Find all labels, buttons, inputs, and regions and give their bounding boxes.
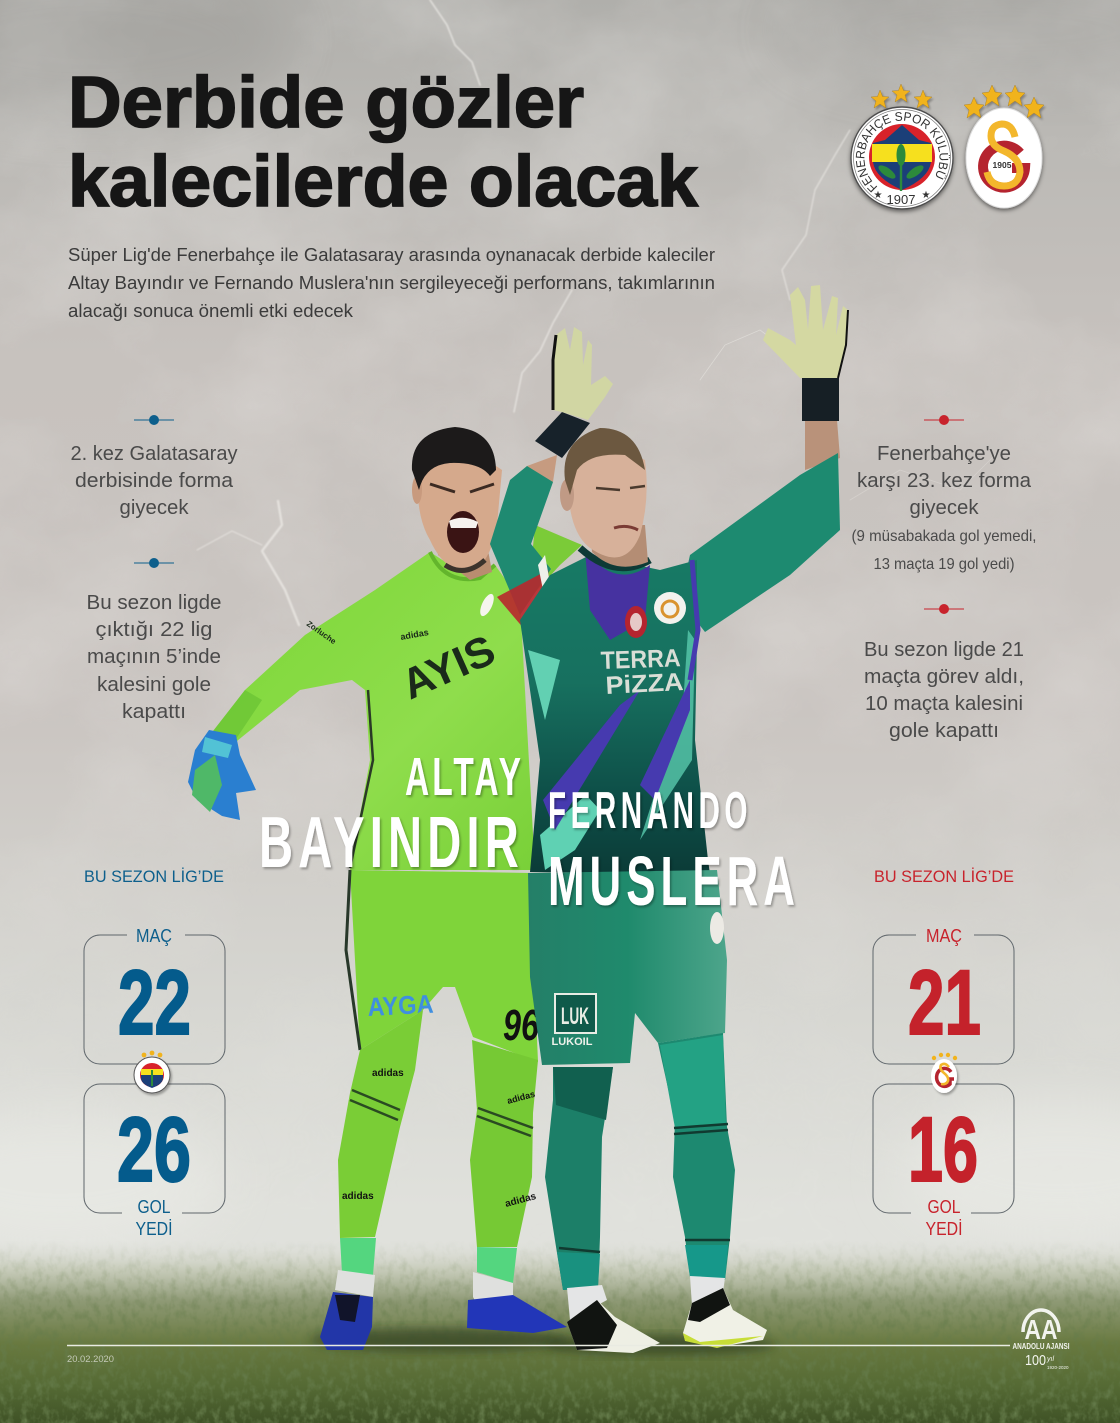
player: Altay Bayındır: AYIS xyxy=(395,626,502,709)
left forearm and glove xyxy=(527,455,557,490)
far shoulder xyxy=(528,525,582,600)
logo: Fenerbahçe badge: 1907 xyxy=(887,192,915,207)
left sleeve xyxy=(490,466,553,615)
box: goals conceded xyxy=(84,1084,225,1239)
logo: Galatasaray badge xyxy=(964,85,1044,208)
logo: Anadolu Ajansı: 1920-2020 xyxy=(1047,1365,1069,1370)
player: Altay Bayındır: AYGA xyxy=(367,989,434,1022)
ground shadow xyxy=(310,1328,570,1352)
title xyxy=(68,63,699,222)
player: Altay Bayındır: adidas xyxy=(504,1191,538,1210)
player names: ALTAY xyxy=(405,747,524,807)
player: Altay Bayındır: adidas xyxy=(372,1068,404,1079)
box: goals conceded: 16 xyxy=(908,1099,978,1201)
legs xyxy=(545,1067,613,1290)
player: Altay Bayındır: adidas xyxy=(506,1089,536,1106)
neck and head xyxy=(590,525,648,567)
box: matches xyxy=(873,926,1014,1064)
socks xyxy=(340,1238,376,1275)
right fact 2: 10 maçta kalesini xyxy=(865,693,1023,715)
title: kalecilerde olacak xyxy=(68,142,699,222)
lightning bolts xyxy=(197,0,1000,625)
small Galatasaray badge xyxy=(931,1053,957,1093)
left fact 1: derbisinde forma xyxy=(75,470,234,492)
logo: Fenerbahçe badge: ★ xyxy=(922,190,931,201)
left fact 2 xyxy=(86,558,222,723)
boots xyxy=(567,1300,660,1353)
player: Fernando Muslera: LUKOIL xyxy=(552,1036,593,1048)
right fact 1: (9 müsabakada gol yemedi, xyxy=(852,528,1036,545)
shorts xyxy=(528,870,727,1065)
intro paragraph: alacağı sonuca önemli etki edecek xyxy=(68,301,354,321)
boots xyxy=(320,1292,373,1350)
stats: Galatasaray xyxy=(873,867,1014,1239)
left fact 1: giyecek xyxy=(120,497,190,519)
logo: Fenerbahçe badge xyxy=(848,84,956,214)
logo: Anadolu Ajansı: ANADOLU AJANSI xyxy=(1012,1341,1070,1351)
player: Fernando Muslera: PiZZA xyxy=(605,668,684,700)
box: goals conceded: YEDİ xyxy=(926,1219,962,1239)
right fact 2: maçta görev aldı, xyxy=(864,666,1024,688)
box: goals conceded xyxy=(873,1084,1014,1239)
player names: MUSLERA xyxy=(548,842,800,920)
player: Altay Bayındır: Zorluche xyxy=(305,619,338,646)
left fact 1 xyxy=(70,415,238,519)
player: Fernando Muslera xyxy=(490,285,848,1355)
grass field xyxy=(0,1240,1120,1423)
box: matches xyxy=(84,926,225,1064)
bottom rule xyxy=(67,1344,1010,1346)
right fact 1: Fenerbahçe'ye xyxy=(877,443,1011,465)
intro paragraph: Altay Bayındır ve Fernando Muslera'nın sergileyeceği performans, takımlarının xyxy=(68,273,715,293)
box: goals conceded: GOL xyxy=(138,1197,170,1217)
player: Altay Bayındır: adidas xyxy=(400,627,429,642)
logo: Galatasaray badge: 1905 xyxy=(993,160,1012,170)
right fact 2 xyxy=(864,604,1024,742)
logo: Anadolu Ajansı: yıl xyxy=(1046,1356,1054,1363)
arm and jersey xyxy=(210,552,535,870)
intro paragraph: Süper Lig'de Fenerbahçe ile Galatasaray arasında oynanacak derbide kaleciler xyxy=(68,245,715,265)
shorts xyxy=(350,870,538,1062)
right fact 1: karşı 23. kez forma xyxy=(857,470,1032,492)
date: 20.02.2020 xyxy=(67,1354,114,1364)
player names: BAYINDIR xyxy=(259,803,524,883)
box: matches: 22 xyxy=(118,952,191,1054)
player: Altay Bayındır: 96 xyxy=(503,1001,539,1050)
right fact 2: Bu sezon ligde 21 xyxy=(864,639,1024,661)
right forearm and glove xyxy=(805,420,840,470)
player: Altay Bayındır xyxy=(188,427,582,1352)
socks xyxy=(567,1285,607,1320)
legs xyxy=(338,1010,423,1238)
right fact 2: gole kapattı xyxy=(889,720,999,742)
stats: Fenerbahçe: BU SEZON LİG’DE xyxy=(84,867,224,886)
left fact 1: 2. kez Galatasaray xyxy=(70,443,238,465)
player names: FERNANDO xyxy=(548,782,752,840)
left fact 2: Bu sezon ligde xyxy=(86,592,222,614)
right sleeve xyxy=(680,453,840,632)
intro paragraph xyxy=(68,245,715,321)
logo: Anadolu Ajansı: AA xyxy=(1024,1314,1058,1345)
left fact 2: kapattı xyxy=(122,701,186,723)
box: matches: MAÇ xyxy=(136,926,172,946)
logo: Anadolu Ajansı xyxy=(1012,1310,1070,1370)
box: goals conceded: 26 xyxy=(117,1099,191,1201)
box: goals conceded: YEDİ xyxy=(136,1219,172,1239)
right fact 1 xyxy=(852,415,1036,573)
box: matches: MAÇ xyxy=(926,926,962,946)
player names xyxy=(259,747,800,920)
left fact 2: maçının 5’inde xyxy=(87,646,221,668)
neck and head xyxy=(438,545,492,580)
torso xyxy=(520,555,710,874)
player: Altay Bayındır: adidas xyxy=(342,1191,374,1202)
left fact 2: kalesini gole xyxy=(97,674,211,696)
glove xyxy=(188,730,256,820)
right fact 1: giyecek xyxy=(910,497,980,519)
logo: Fenerbahçe badge: ★ xyxy=(874,190,883,201)
logo: Anadolu Ajansı: 100 xyxy=(1025,1352,1046,1369)
stats: Galatasaray: BU SEZON LİG’DE xyxy=(874,867,1014,886)
title: Derbide gözler xyxy=(68,63,584,143)
box: goals conceded: GOL xyxy=(928,1197,960,1217)
logo: Fenerbahçe badge: FENERBAHÇE SPOR KULÜBÜ xyxy=(856,112,950,192)
box: matches: 21 xyxy=(908,952,981,1054)
player: Fernando Muslera: TERRA xyxy=(600,644,681,675)
left fact 2: çıktığı 22 lig xyxy=(96,619,212,641)
small Fenerbahçe badge xyxy=(134,1051,170,1093)
right fact 1: 13 maçta 19 gol yedi) xyxy=(874,556,1014,573)
player: Fernando Muslera: LUK xyxy=(561,1003,589,1030)
stats: Fenerbahçe xyxy=(84,867,225,1239)
